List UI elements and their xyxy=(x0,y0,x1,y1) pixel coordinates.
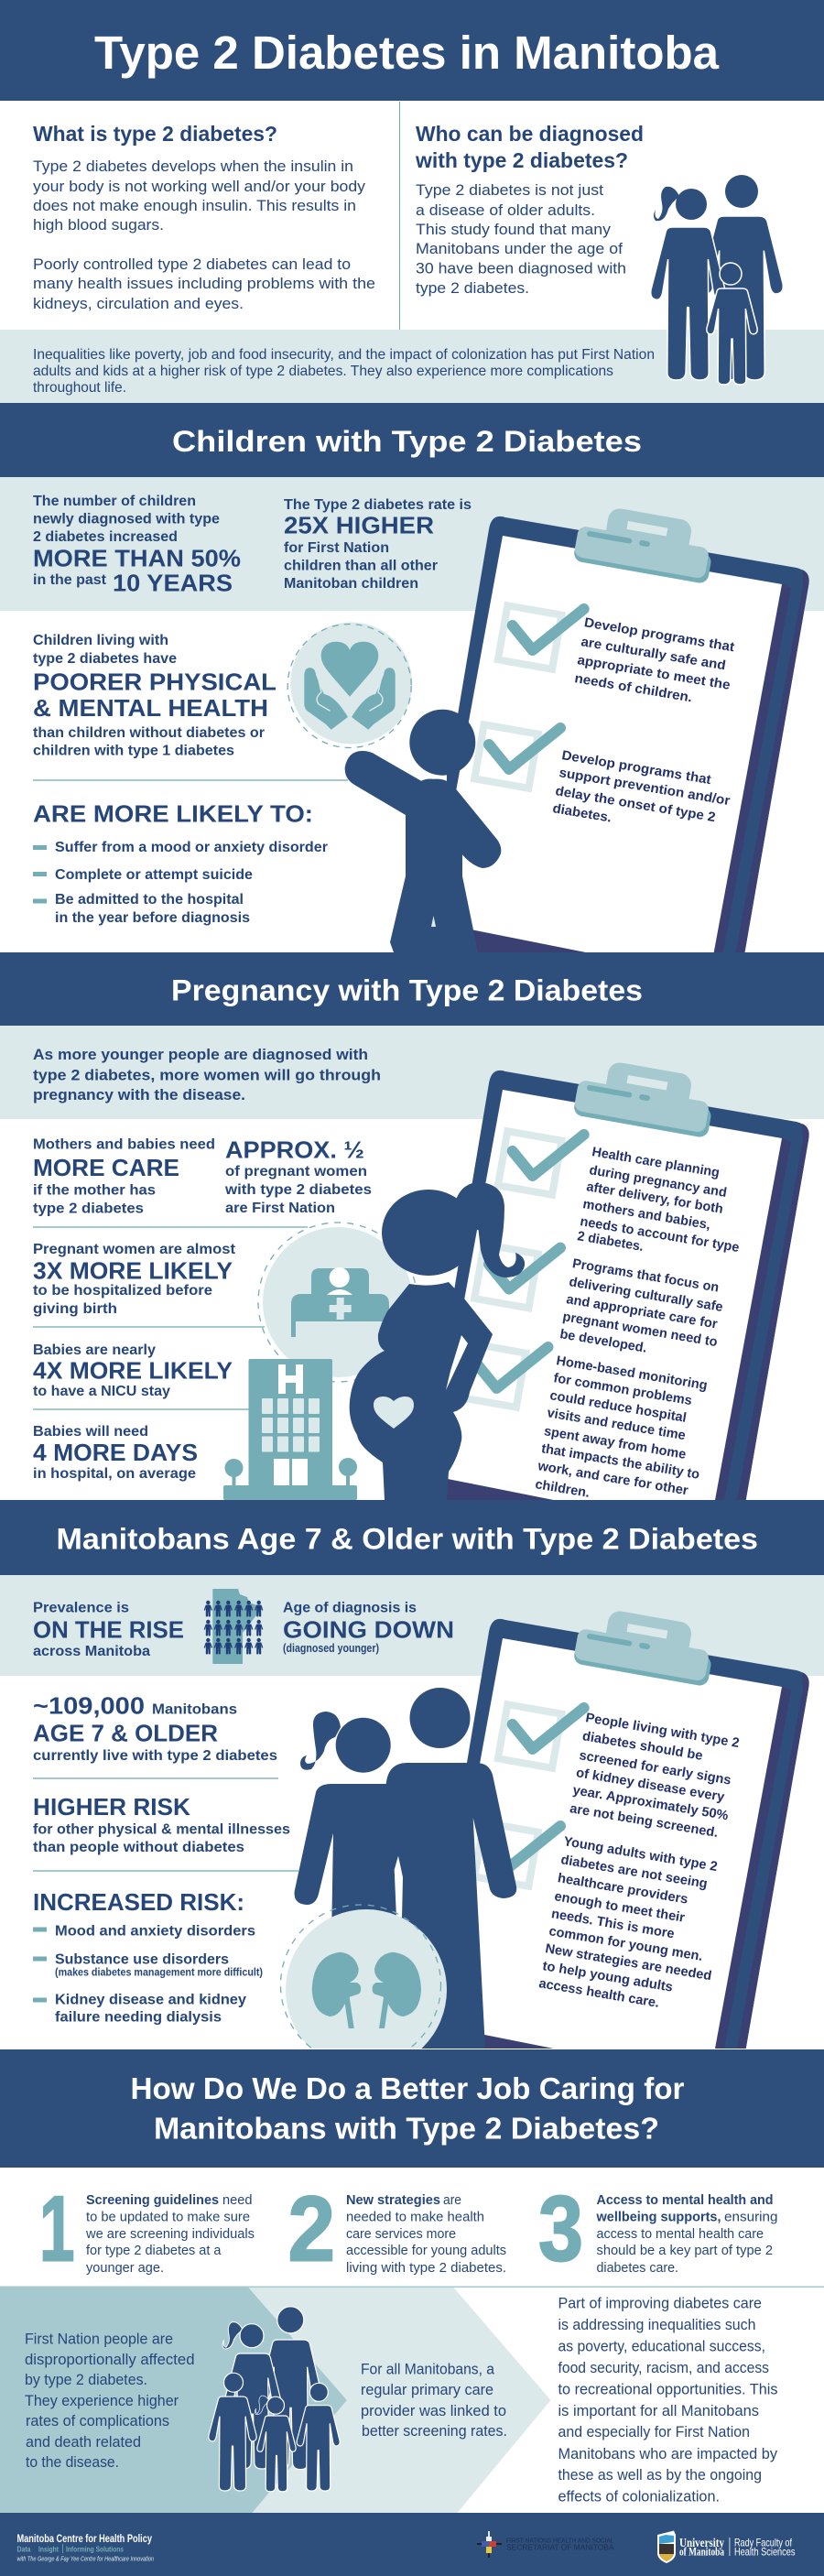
recommendation 1: to be updated to make sure xyxy=(86,2209,250,2225)
checklist text: age 7 and older: diabetes are not seeing xyxy=(559,1853,709,1892)
text block: poorer health: Children living with xyxy=(33,633,168,648)
text block: more likely to: ARE MORE LIKELY TO: xyxy=(33,800,313,828)
text block: who can be diagnosed: type 2 diabetes. xyxy=(416,279,529,297)
text block: 3x more likely: to be hospitalized before xyxy=(33,1283,212,1299)
checklist text: pregnancy: Home-based monitoring xyxy=(555,1353,709,1394)
stat: more than 50% xyxy=(33,494,241,597)
text block: more care xyxy=(33,1137,215,1216)
recommendation 2: are xyxy=(443,2192,461,2208)
icon: check box 2 xyxy=(474,1822,560,1886)
panel: title banner xyxy=(0,0,824,101)
icon: hospital bed xyxy=(258,1223,417,1382)
text block: more likely to: in the year before diagnosis xyxy=(55,910,250,926)
logo: manitoba centre for health policy: Informing Solutions xyxy=(66,2544,124,2553)
checklist text: age 7 and older: of kidney disease every xyxy=(575,1766,725,1805)
icon: family of five xyxy=(209,2307,340,2492)
recommendation 2: 2 xyxy=(287,2178,335,2280)
text block: more care: if the mother has xyxy=(33,1183,156,1198)
text block: on the rise: across Manitoba xyxy=(33,1644,150,1659)
text block: on the rise xyxy=(33,1601,184,1659)
icon: check box 1 xyxy=(498,605,584,669)
logo: university of manitoba: of Manitoba xyxy=(679,2544,724,2559)
text block: inequalities: these as well as by the ongoing xyxy=(558,2466,762,2484)
checklist text: age 7 and older: New strategies are needed xyxy=(544,1941,712,1984)
icon: manitoba map with people xyxy=(204,1589,263,1664)
text block: 4 more days: in hospital, on average xyxy=(33,1466,196,1482)
text block: more care: type 2 diabetes xyxy=(33,1201,144,1216)
text block: first nation people: and death related xyxy=(26,2433,141,2451)
checklist text: pregnancy: be developed. xyxy=(558,1327,648,1356)
text block: what is type 2 diabetes: does not make enough insulin. This results in xyxy=(33,197,356,214)
heading: better job caring xyxy=(0,2049,824,2168)
figure: child pointing xyxy=(345,710,501,952)
panel: pregnancy xyxy=(0,1026,824,1525)
stat: 25x higher: The Type 2 diabetes rate is xyxy=(284,497,472,513)
stat: more than 50%: MORE THAN 50% xyxy=(33,544,241,571)
text block: increased risk: failure needing dialysis xyxy=(55,2009,222,2026)
text block: more likely to xyxy=(33,800,328,926)
logo: first nations health and social secretariat xyxy=(477,2531,614,2558)
checklist text: pregnancy: could reduce hospital xyxy=(548,1388,688,1426)
stat: 25x higher xyxy=(284,497,472,592)
text block: what is type 2 diabetes: many health issues including problems with the xyxy=(33,275,375,292)
checklist text: children: support prevention and/or xyxy=(558,766,732,809)
text block: first nation people: to the disease. xyxy=(26,2453,119,2471)
recommendation 3: diabetes care. xyxy=(597,2260,678,2276)
text block: primary care: For all Manitobans, a xyxy=(361,2361,494,2377)
checklist text: pregnancy: that impacts the ability to xyxy=(540,1441,700,1483)
title: Type 2 Diabetes in Manitoba xyxy=(94,27,720,79)
panel: three recommendations xyxy=(39,2178,778,2280)
stat: 25x higher: for First Nation xyxy=(284,540,389,556)
text block: approx one half: are First Nation xyxy=(225,1201,335,1216)
logo: university of manitoba xyxy=(657,2531,795,2563)
checklist text: age 7 and older: to help young adults xyxy=(541,1959,674,1995)
text block: 3x more likely: Pregnant women are almost xyxy=(33,1242,236,1257)
text block: 3x more likely: giving birth xyxy=(33,1301,117,1317)
text block: 4 more days xyxy=(33,1424,198,1482)
checklist text: pregnancy: after delivery, for both xyxy=(585,1179,724,1217)
checklist text: children: delay the onset of type 2 xyxy=(554,784,717,825)
text block: on the rise: ON THE RISE xyxy=(33,1615,184,1643)
checklist text: age 7 and older: access health care. xyxy=(537,1976,660,2011)
text block: poorer health: type 2 diabetes have xyxy=(33,651,177,667)
checklist text: pregnancy: needs to account for type xyxy=(579,1214,741,1255)
checklist text: pregnancy: visits and reduce time xyxy=(546,1406,687,1443)
text block: inequalities xyxy=(558,2295,778,2505)
text block: poorer health: children with type 1 diabetes xyxy=(33,744,234,758)
recommendation 2: accessible for young adults xyxy=(346,2243,506,2258)
text block: going down: GOING DOWN xyxy=(283,1615,454,1643)
text block: inequalities: Part of improving diabetes care xyxy=(558,2295,762,2311)
text block: more care: Mothers and babies need xyxy=(33,1137,215,1152)
checklist text: pregnancy: for common problems xyxy=(552,1371,693,1408)
checklist text: children: Develop programs that xyxy=(583,615,735,655)
text block: younger people xyxy=(33,1046,381,1103)
text block: who can be diagnosed: This study found that many xyxy=(416,221,612,238)
stat: 25x higher: children than all other xyxy=(284,559,438,573)
text block: first nation people: First Nation people are xyxy=(25,2330,173,2348)
text block: 109,000 manitobans: AGE 7 & OLDER xyxy=(33,1720,218,1747)
text block: first nation people: by type 2 diabetes. xyxy=(25,2371,147,2388)
text block: inequalities: is important for all Manitobans xyxy=(558,2402,759,2419)
text block: approx one half xyxy=(224,1136,372,1216)
icon: kidneys xyxy=(280,1904,447,2049)
text block: poorer health: & MENTAL HEALTH xyxy=(33,694,268,722)
checklist text: children: are culturally safe and xyxy=(580,635,727,673)
recommendation 2: New strategies xyxy=(346,2192,440,2208)
text block: first nation people: They experience higher xyxy=(25,2392,179,2409)
text block: primary care xyxy=(361,2361,507,2440)
text block: more likely to: Complete or attempt suicide xyxy=(55,867,253,883)
checklist text: age 7 and older: common for young men. xyxy=(548,1924,704,1964)
text block: going down xyxy=(283,1601,454,1655)
checklist text: pregnancy xyxy=(534,1145,741,1501)
logo: manitoba centre for health policy xyxy=(16,2534,154,2562)
text block: 3x more likely xyxy=(33,1242,236,1317)
recommendation 1: 1 xyxy=(39,2178,75,2280)
stat: more than 50%: The number of children xyxy=(33,494,196,509)
text block: going down: (diagnosed younger) xyxy=(283,1641,379,1655)
stat: 25x higher: Manitoban children xyxy=(284,576,418,592)
logo: manitoba centre for health policy: Manitoba Centre for Health Policy xyxy=(16,2534,152,2545)
recommendation 1: younger age. xyxy=(86,2260,164,2276)
text block: inequalities: is addressing inequalities such xyxy=(558,2316,756,2333)
text block: 4x more likely xyxy=(33,1342,233,1399)
text block: increased risk: Substance use disorders xyxy=(55,1952,229,1967)
text block: 109,000 manitobans: currently live with type 2 diabetes xyxy=(33,1748,277,1764)
recommendation 3: ensuring xyxy=(724,2209,778,2225)
text block: increased risk: INCREASED RISK: xyxy=(33,1888,244,1916)
logo: first nations health and social secretariat: FIRST NATIONS HEALTH AND SOCIAL xyxy=(506,2537,613,2544)
recommendation 1: Screening guidelines xyxy=(86,2192,219,2208)
checklist text: age 7 and older: screened for early signs xyxy=(578,1748,732,1788)
recommendation 2: living with type 2 diabetes. xyxy=(346,2260,506,2276)
checklist text: age 7 and older: enough to meet their xyxy=(553,1889,686,1926)
checklist text: pregnancy: Programs that focus on xyxy=(571,1256,720,1296)
text block: 4x more likely: Babies are nearly xyxy=(33,1342,156,1358)
text block: approx one half: APPROX. ½ xyxy=(225,1136,364,1163)
heading: age 7 and older xyxy=(0,1500,824,1575)
text block: approx one half: with type 2 diabetes xyxy=(224,1182,372,1198)
panel: inequalities band: Inequalities like poverty, job and food insecurity, and the impact of colonization has put First Nation xyxy=(33,347,655,363)
text block: 4 more days: Babies will need xyxy=(33,1424,148,1440)
checklist text: age 7 and older: healthcare providers xyxy=(557,1871,689,1908)
text block: increased risk xyxy=(33,1888,263,2026)
text block: who can be diagnosed: with type 2 diabetes? xyxy=(415,148,628,172)
text block: what is type 2 diabetes: Poorly controlled type 2 diabetes can lead to xyxy=(33,255,351,273)
panel: inequalities band: throughout life. xyxy=(33,380,126,396)
recommendation 3: Access to mental health and xyxy=(597,2192,773,2208)
heading: age 7 and older: Manitobans Age 7 & Older with Type 2 Diabetes xyxy=(57,1522,758,1555)
text block: more likely to: Be admitted to the hospital xyxy=(55,892,244,908)
recommendation 2 xyxy=(287,2178,506,2280)
text block: first nation people: rates of complications xyxy=(26,2412,169,2429)
text block: what is type 2 diabetes: Type 2 diabetes develops when the insulin in xyxy=(33,158,353,175)
icon: check box 1 xyxy=(498,1704,584,1768)
icon: check box 2 xyxy=(474,1245,560,1308)
text block: what is type 2 diabetes xyxy=(33,122,375,312)
text block: primary care: provider was linked to xyxy=(361,2402,506,2419)
recommendation 3 xyxy=(538,2178,778,2280)
icon: check box 1 xyxy=(498,1131,584,1195)
stat: more than 50%: 10 YEARS xyxy=(113,570,233,597)
panel: children xyxy=(0,477,824,971)
recommendation 1: we are screening individuals xyxy=(85,2226,255,2242)
checklist text: pregnancy: work, and care for other xyxy=(536,1459,689,1498)
text block: higher risk: HIGHER RISK xyxy=(33,1793,190,1821)
heading: children: Children with Type 2 Diabetes xyxy=(172,425,642,458)
text block: primary care: regular primary care xyxy=(361,2381,493,2398)
clipboard: pregnancy xyxy=(447,1062,809,1500)
text block: more care: MORE CARE xyxy=(33,1154,179,1181)
panel: inequalities band: adults and kids at a higher risk of type 2 diabetes. They also experience more complications xyxy=(33,364,613,379)
text block: inequalities: as poverty, educational success, xyxy=(558,2337,765,2355)
text block: what is type 2 diabetes: What is type 2 diabetes? xyxy=(33,122,277,146)
icon: hospital building xyxy=(223,1359,357,1500)
text block: what is type 2 diabetes: high blood sugars. xyxy=(33,216,164,234)
text block: increased risk: Mood and anxiety disorders xyxy=(55,1923,255,1940)
checklist text: children: Develop programs that xyxy=(560,748,712,788)
text block: 109,000 manitobans xyxy=(33,1692,277,1764)
text block: first nation people xyxy=(25,2330,194,2471)
icon: family xyxy=(651,175,783,385)
text block: who can be diagnosed: a disease of older adults. xyxy=(416,201,595,219)
text block: inequalities: Manitobans who are impacted by xyxy=(558,2445,777,2462)
recommendation 1 xyxy=(39,2178,255,2280)
text block: 3x more likely: 3X MORE LIKELY xyxy=(33,1256,233,1284)
panel: chevrons xyxy=(0,2286,824,2513)
icon: check box 2 xyxy=(474,724,560,788)
checklist text: age 7 and older: needs. This is more xyxy=(550,1907,676,1941)
panel: footer xyxy=(0,2513,824,2576)
text block: first nation people: disproportionally affected xyxy=(25,2351,194,2368)
logo: manitoba centre for health policy: with The George & Fay Yee Centre for Healthcare Innovation xyxy=(16,2555,154,2562)
checklist text: pregnancy: mothers and babies, xyxy=(581,1197,711,1233)
text block: primary care: better screening rates. xyxy=(362,2422,507,2440)
stat: more than 50%: newly diagnosed with type xyxy=(33,511,220,527)
text block: poorer health xyxy=(33,633,276,758)
clipboard: age 7 and older xyxy=(467,1612,809,2049)
stat: more than 50%: 2 diabetes increased xyxy=(33,529,178,545)
text block: higher risk: than people without diabetes xyxy=(33,1840,244,1855)
stat: more than 50%: in the past xyxy=(33,572,107,588)
text block: inequalities: effects of colonialization. xyxy=(558,2487,720,2505)
checklist text: age 7 and older: diabetes should be xyxy=(581,1729,704,1764)
checklist text: age 7 and older: year. Approximately 50% xyxy=(571,1783,730,1823)
panel: age 7 and older xyxy=(0,1575,824,2073)
checklist text: pregnancy: 2 diabetes. xyxy=(576,1229,645,1255)
text block: increased risk: Kidney disease and kidney xyxy=(55,1993,246,2007)
text block: who can be diagnosed: Who can be diagnosed xyxy=(416,122,644,146)
text block: 4 more days: 4 MORE DAYS xyxy=(33,1439,198,1466)
checklist text: pregnancy: spent away from home xyxy=(543,1424,687,1462)
text block: 4x more likely: to have a NICU stay xyxy=(33,1384,170,1399)
text block: higher risk: for other physical & mental illnesses xyxy=(33,1822,290,1837)
text block: poorer health: than children without diabetes or xyxy=(33,725,265,741)
heading: pregnancy xyxy=(0,952,824,1026)
recommendation 3: wellbeing supports, xyxy=(596,2209,721,2225)
recommendation 1: need xyxy=(222,2192,253,2208)
text block: inequalities: to recreational opportunities. This xyxy=(558,2381,778,2397)
recommendation 2: needed to make health xyxy=(346,2209,484,2225)
checklist text: age 7 and older: People living with type 2 xyxy=(584,1711,741,1751)
text block: younger people: type 2 diabetes, more women will go through xyxy=(33,1066,381,1084)
logo: manitoba centre for health policy: Data xyxy=(16,2544,31,2553)
text block: inequalities: food security, racism, and access xyxy=(558,2359,769,2376)
recommendation 3: 3 xyxy=(538,2178,583,2280)
text block: more likely to: Suffer from a mood or anxiety disorder xyxy=(55,840,328,855)
text block: poorer health: POORER PHYSICAL xyxy=(33,668,276,696)
text block: inequalities: and especially for First Nation xyxy=(558,2423,750,2440)
icon: check box 3 xyxy=(462,1343,548,1408)
heading: pregnancy: Pregnancy with Type 2 Diabetes xyxy=(171,974,643,1007)
checklist text: pregnancy: pregnant women need to xyxy=(561,1310,719,1350)
icon: heart in hands xyxy=(287,623,412,747)
text block: who can be diagnosed: Manitobans under the age of xyxy=(416,240,623,257)
text block: who can be diagnosed xyxy=(415,122,644,297)
stat: 25x higher: 25X HIGHER xyxy=(284,511,434,538)
checklist text: pregnancy: and appropriate care for xyxy=(565,1292,719,1332)
recommendation 3: access to mental health care xyxy=(597,2226,764,2242)
heading: better job caring: Manitobans with Type 2 Diabetes? xyxy=(154,2112,659,2145)
heading: children xyxy=(0,403,824,477)
checklist text: children xyxy=(551,615,735,826)
checklist text: children: diabetes. xyxy=(551,801,613,826)
chevron: first nation xyxy=(0,2288,347,2513)
heading: better job caring: How Do We Do a Better Job Caring for xyxy=(130,2071,685,2105)
text block: 109,000 manitobans: Manitobans xyxy=(152,1701,237,1718)
logo: university of manitoba: Health Sciences xyxy=(734,2546,795,2559)
recommendation 3: should be a key part of type 2 xyxy=(597,2243,773,2258)
logo: university of manitoba: University xyxy=(679,2537,724,2550)
text block: younger people: pregnancy with the disease. xyxy=(33,1086,245,1103)
clipboard: children xyxy=(447,509,809,952)
recommendation 1: for type 2 diabetes at a xyxy=(86,2243,222,2258)
figure: adult couple xyxy=(295,1688,516,2049)
checklist text: pregnancy: delivering culturally safe xyxy=(568,1275,724,1315)
text block: higher risk xyxy=(33,1793,290,1855)
logo: manitoba centre for health policy: Insight xyxy=(38,2544,59,2553)
chevron: primary care xyxy=(249,2288,551,2513)
checklist text: children: appropriate to meet the xyxy=(576,653,732,693)
checklist text: age 7 and older: Young adults with type 2 xyxy=(562,1834,719,1875)
checklist text: age 7 and older: are not being screened. xyxy=(569,1801,719,1841)
recommendation 2: care services more xyxy=(346,2226,456,2242)
figure: pregnant woman xyxy=(350,1182,525,1500)
panel: inequalities band xyxy=(0,330,824,403)
text block: on the rise: Prevalence is xyxy=(33,1601,129,1615)
checklist text: pregnancy: during pregnancy and xyxy=(588,1163,728,1201)
text block: who can be diagnosed: Type 2 diabetes is not just xyxy=(416,181,603,199)
logo: first nations health and social secretariat: SECRETARIAT OF MANITOBA xyxy=(506,2542,614,2551)
logo: university of manitoba: Rady Faculty of xyxy=(734,2537,792,2549)
checklist text: age 7 and older xyxy=(537,1711,741,2011)
text block: who can be diagnosed: 30 have been diagnosed with xyxy=(416,260,626,277)
text block: going down: Age of diagnosis is xyxy=(283,1601,417,1615)
checklist text: children: needs of children. xyxy=(573,671,693,705)
text block: 4x more likely: 4X MORE LIKELY xyxy=(33,1357,233,1385)
text block: younger people: As more younger people are diagnosed with xyxy=(33,1046,368,1063)
text block: 109,000 manitobans: ~109,000 xyxy=(33,1692,145,1720)
panel: introduction xyxy=(0,102,824,403)
text block: what is type 2 diabetes: kidneys, circulation and eyes. xyxy=(33,295,244,312)
text block: what is type 2 diabetes: your body is not working well and/or your body xyxy=(33,178,366,195)
text block: increased risk: (makes diabetes management more difficult) xyxy=(55,1965,263,1978)
checklist text: pregnancy: Health care planning xyxy=(591,1145,721,1180)
text block: approx one half: of pregnant women xyxy=(225,1164,367,1179)
checklist text: pregnancy: children. xyxy=(534,1477,591,1501)
